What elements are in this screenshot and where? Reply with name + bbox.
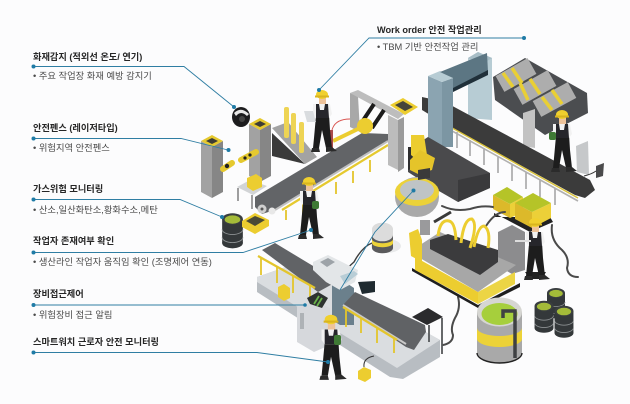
callout: equipment access: • 위험장비 접근 알림 [33,309,112,320]
small cylinder sensor [343,223,401,274]
sloped ramp with yellow rods [272,107,317,164]
barrels group [535,288,573,338]
worker: top with clipboard [304,90,337,152]
callout: gas monitoring: 가스위험 모니터링 [33,183,103,194]
dark side table [412,308,443,354]
green liquid tank [477,298,522,363]
connector: turntable to tunnel [340,188,416,290]
cabinet and control box [576,141,604,178]
callout: gas monitoring [32,183,224,219]
yellow box on base [278,284,290,301]
cables [442,206,578,345]
safety fence pillar right [249,118,271,182]
main diagonal conveyor [422,97,595,205]
yellow box with cable [358,356,374,382]
callout: fire detection: • 주요 작업장 화재 예방 감지기 [33,70,152,81]
worker: right of conveyor [549,110,577,172]
callout: work order: • TBM 기반 안전작업 관리 [377,41,478,52]
work table with yellow box [237,174,267,209]
worker: lower with smartwatch [319,315,347,380]
callout: safety fence: • 위험지역 안전펜스 [33,143,110,153]
callout: worker presence: • 생산라인 작업자 움직임 확인 (조명제어 연동) [33,256,212,267]
inspection tunnel and white unit [313,255,375,325]
upper-left conveyor [255,133,388,220]
callout: smartwatch: 스마트워치 근로자 안전 모니터링 [33,336,159,347]
roller machine [493,58,588,148]
lower machine base [257,262,440,379]
callout: work order: Work order 안전 작업관리 [377,24,482,35]
callout: smartwatch [32,336,330,364]
callout: work order [317,24,526,92]
icon: fire detection camera [232,107,250,127]
gate front pillar and beam [428,53,488,147]
yellow robot on turntable [395,135,439,217]
worker: middle with tablet [298,177,324,239]
callout: gas monitoring: • 산소,일산화탄소,황화수소,메탄 [33,205,158,215]
safety fence pillar left [201,135,223,198]
robot arm and gantry [329,90,404,172]
lower-left conveyor [258,243,338,300]
yellow tray on gantry [390,98,418,115]
central yellow machine [409,212,520,308]
callout: fire detection [32,51,236,109]
callout: worker presence [32,228,313,267]
rear gate pillar [468,52,492,120]
callout: safety fence [32,122,230,153]
callout: fire detection: 화재감지 (적외선 온도/ 연기) [33,51,142,62]
left barrel and tray [222,213,269,248]
robot base [408,137,490,202]
callout: equipment access: 장비접근제어 [33,288,84,299]
callout: worker presence: 작업자 존재여부 확인 [33,235,114,246]
icon: laser fence sensors [223,152,256,169]
lower-right conveyor [343,292,426,353]
callout: equipment access [32,288,307,320]
callout: safety fence: 안전펜스 (레이저타입) [33,122,118,133]
worker: by central machine [498,218,550,280]
yellow material boxes [493,187,553,232]
control cabinet with screen [297,292,330,352]
